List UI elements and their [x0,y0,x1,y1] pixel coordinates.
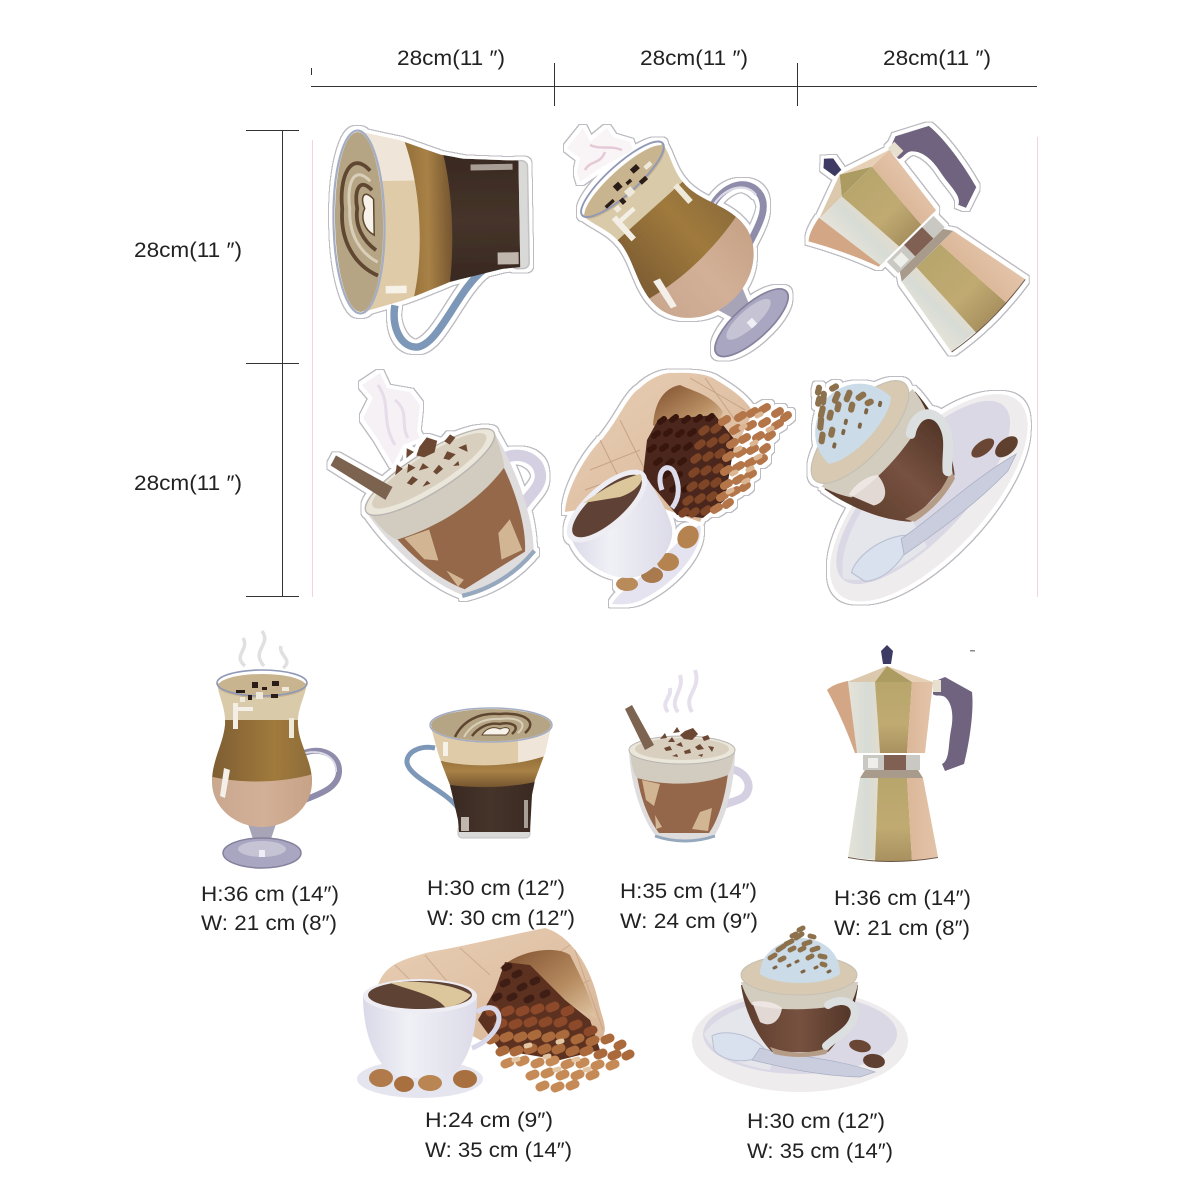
item: cream cup with stick and steam [625,670,749,842]
item: irish coffee glass with steam [205,631,339,868]
sticker: tilted moka pot [775,90,1057,372]
label: top dimension 3: 28cm(11 ″) [883,47,991,70]
item: moka pot [827,645,973,862]
sheet edges [312,137,1038,597]
sticker: coffee sack with beans and cup [555,373,788,604]
caption: irish coffee glass size: W: 21 cm (8″) [201,912,337,935]
dimension lines: top width scale [311,63,1037,106]
caption: coffee sack size: H:24 cm (9″) [425,1109,553,1132]
caption: cream cup size [620,880,758,933]
label: left dimension 2: 28cm(11 ″) [134,472,242,495]
caption: moka pot size: W: 21 cm (8″) [834,917,970,940]
caption: coffee sack size [425,1109,572,1162]
label: left dimension 1: 28cm(11 ″) [134,239,242,262]
caption: latte cup size [427,877,575,930]
caption: moka pot size [834,887,971,940]
caption: moka pot size: H:36 cm (14″) [834,887,971,910]
caption: cappuccino size [747,1110,893,1163]
dimension lines: left height scale [246,130,299,597]
item: latte cup [407,708,558,838]
item: coffee sack, beans and cup [357,928,630,1098]
sticker: tilted irish coffee glass with steam [562,106,832,381]
caption: cappuccino size: H:30 cm (12″) [747,1110,885,1133]
sticker: tilted cup with cream and stick [327,368,579,626]
caption: latte cup size: W: 30 cm (12″) [427,907,575,930]
label: top dimension 2: 28cm(11 ″) [640,47,748,70]
sticker: tilted cappuccino on saucer [771,342,1060,632]
caption: cream cup size: W: 24 cm (9″) [620,910,758,933]
label: top dimension 1: 28cm(11 ″) [397,47,505,70]
item: cappuccino on saucer [692,928,908,1092]
caption: cappuccino size: W: 35 cm (14″) [747,1140,893,1163]
caption: latte cup size: H:30 cm (12″) [427,877,565,900]
caption: irish coffee glass size [201,883,339,935]
caption: coffee sack size: W: 35 cm (14″) [425,1139,572,1162]
small speck [970,650,975,652]
caption: cream cup size: H:35 cm (14″) [620,880,757,903]
sticker: tilted latte cup [332,119,531,348]
caption: irish coffee glass size: H:36 cm (14″) [201,883,339,906]
